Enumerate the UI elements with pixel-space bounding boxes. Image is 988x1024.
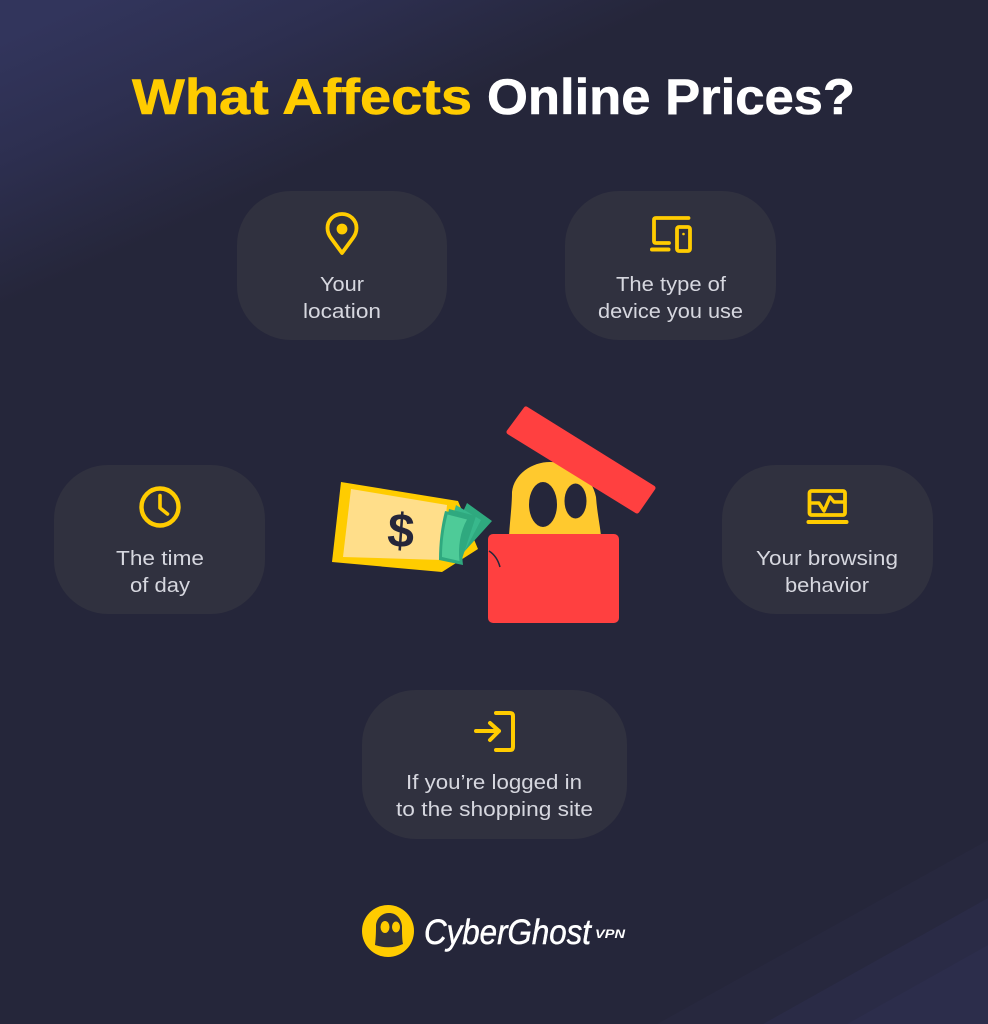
ghost [509,462,601,536]
icon: login arrow [476,713,513,750]
icon: laptop and phone [652,218,690,251]
title [132,69,855,125]
text: device type [598,274,743,323]
box [488,534,619,623]
green cash [439,503,492,565]
text: your location: location [303,301,381,323]
text: your location [303,274,381,323]
text: time of day: of day [130,575,190,597]
text: time of day: The time [116,548,204,570]
title: What Affects [132,69,472,125]
text: browsing behavior: behavior [785,575,869,597]
logo: CyberGhost VPN [362,905,625,957]
panel: your location [237,191,447,340]
text: logged in: to the shopping site [396,799,593,821]
icon: clock [142,488,178,526]
box lid [509,409,653,511]
text: logged in: If you’re logged in [406,772,582,794]
panel: device type [565,191,776,340]
icon: location pin [328,214,356,253]
logo wordmark: CyberGhost [424,913,592,952]
text: device type: device you use [598,301,743,323]
text: device type: The type of [616,274,726,296]
text: time of day [116,548,204,597]
price tag bill: $ [386,504,416,559]
text: your location: Your [320,274,364,296]
panel: browsing behavior [722,465,933,614]
logo VPN: VPN [595,927,625,941]
panel: time of day [54,465,265,614]
panel: logged in [362,690,627,839]
price tag bill [332,482,478,572]
title: Online Prices? [487,69,855,125]
logo icon [362,905,414,957]
icon: monitor with pulse [808,491,846,522]
text: browsing behavior: Your browsing [756,548,898,570]
text: browsing behavior [756,548,898,597]
text: logged in [396,772,593,821]
illustration: ghost in box with money [332,409,653,623]
